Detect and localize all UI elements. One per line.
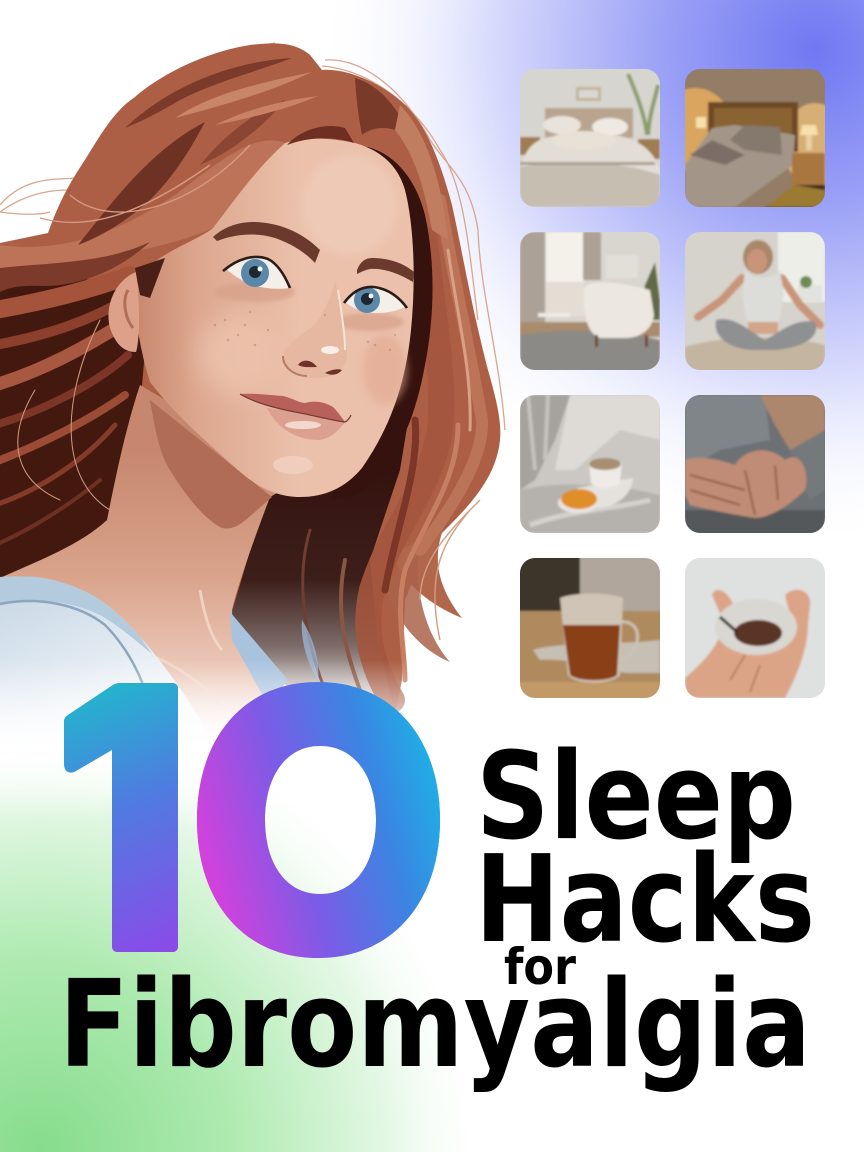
number 1: 1 — [4, 598, 265, 1036]
photo: hands on grey blanket — [685, 395, 825, 533]
neck shadow under chin — [150, 400, 272, 528]
face — [135, 139, 414, 497]
title — [64, 682, 810, 1092]
nose — [283, 280, 347, 378]
number 0: 0 — [176, 603, 462, 1037]
neck — [0, 385, 300, 745]
portrait of woman with auburn hair — [0, 43, 505, 820]
photo: neutral bedroom — [520, 69, 660, 207]
right eye — [344, 287, 407, 313]
left eye — [223, 257, 290, 289]
left eyebrow — [213, 222, 320, 263]
photo: tea glass on table — [520, 558, 660, 698]
stray hair strands — [0, 43, 505, 430]
photo grid — [515, 64, 847, 703]
freckles — [214, 311, 396, 351]
left lower dark hair — [0, 272, 150, 585]
photo: warm lit bedroom — [685, 69, 825, 207]
shirt — [0, 576, 318, 755]
photo: breakfast tray on linen — [520, 395, 660, 533]
hair flow on crown — [0, 58, 318, 298]
mouth — [240, 394, 351, 440]
forehead highlight — [302, 155, 398, 255]
hair silhouette — [0, 43, 500, 715]
collar fold lines — [140, 590, 222, 705]
cheek and jaw shading — [198, 313, 282, 397]
hair part and right crown — [287, 126, 354, 145]
photo: woman meditating — [685, 232, 825, 370]
lower fade — [0, 660, 430, 820]
ear — [108, 272, 139, 352]
left lower rust strands — [0, 275, 130, 545]
photo: room with armchair — [520, 232, 660, 370]
heading: Sleep: Sleep — [476, 728, 796, 867]
chin highlight — [273, 456, 313, 474]
heading: for: for — [504, 938, 576, 996]
right rust strands — [303, 200, 482, 700]
right eyebrow — [357, 258, 414, 282]
hair strand tips — [385, 500, 480, 662]
photo: hand holding bowl of seeds — [685, 558, 825, 698]
inner dark hair along the face — [330, 146, 433, 500]
right dark hair behind neck — [228, 360, 418, 715]
